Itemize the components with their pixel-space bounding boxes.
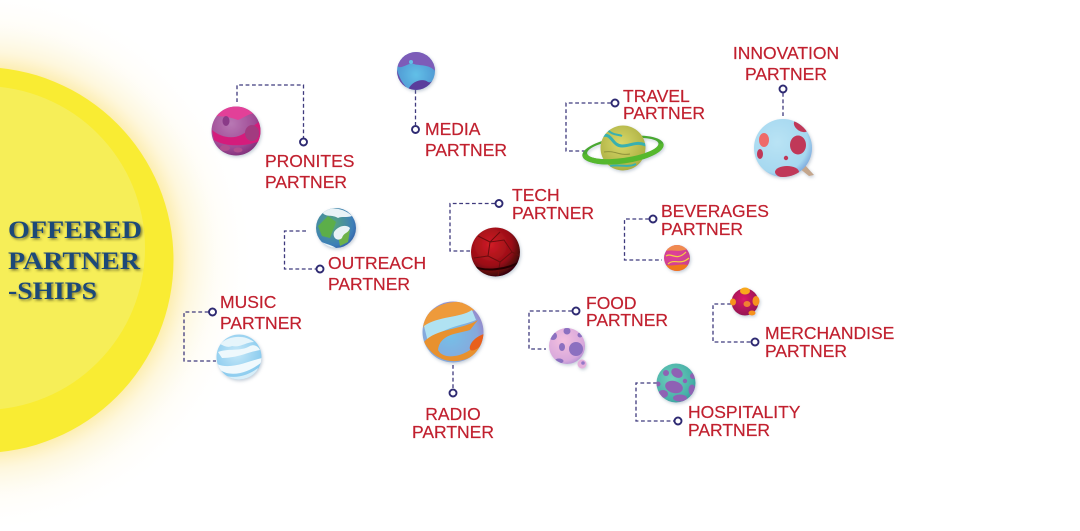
sun outer disc xyxy=(0,67,174,453)
node xyxy=(572,308,580,314)
label: PARTNER xyxy=(512,203,594,223)
connector xyxy=(184,312,216,361)
label: PARTNER xyxy=(661,219,743,239)
title: offered partnerships: PARTNER xyxy=(8,246,141,275)
merchandise partner xyxy=(713,288,894,361)
innovation partner xyxy=(733,43,839,178)
node xyxy=(316,266,324,272)
label: MERCHANDISE xyxy=(765,323,894,343)
media partner xyxy=(396,51,507,160)
title: offered partnerships: -SHIPS xyxy=(8,276,97,305)
node xyxy=(752,338,758,346)
outreach partner xyxy=(284,208,426,294)
node xyxy=(300,138,307,146)
planet: candy xyxy=(664,245,690,272)
label: PARTNER xyxy=(265,172,347,192)
node xyxy=(209,308,216,316)
beverages partner xyxy=(624,201,769,272)
tech partner xyxy=(450,185,594,276)
hospitality partner xyxy=(636,364,801,440)
planet: craters xyxy=(754,117,814,178)
planet: pink moon xyxy=(549,328,586,368)
connector xyxy=(450,204,495,251)
label: HOSPITALITY xyxy=(688,402,801,422)
planet: teal xyxy=(656,364,696,402)
title: offered partnerships xyxy=(8,215,142,305)
node xyxy=(674,418,682,424)
label: FOOD xyxy=(586,293,637,313)
label: TRAVEL xyxy=(623,86,690,106)
label: BEVERAGES xyxy=(661,201,769,221)
node xyxy=(612,100,618,106)
planet: orange swirl xyxy=(422,302,484,362)
node xyxy=(412,126,419,133)
planet: ice xyxy=(216,334,262,380)
planet: earth xyxy=(316,208,356,250)
label: PARTNER xyxy=(425,140,507,160)
node xyxy=(780,86,786,92)
connector xyxy=(636,383,674,421)
travel partner xyxy=(566,86,705,170)
label: PARTNER xyxy=(765,341,847,361)
planet: red xyxy=(471,228,520,276)
node xyxy=(450,390,456,396)
title: offered partnerships: OFFERED xyxy=(8,215,142,244)
connector xyxy=(284,231,316,269)
label: TECH xyxy=(512,185,560,205)
connector xyxy=(713,304,751,342)
connector xyxy=(782,93,784,118)
connector xyxy=(566,103,611,151)
label: PARTNER xyxy=(623,103,705,123)
label: PARTNER xyxy=(586,310,668,330)
label: RADIO xyxy=(425,404,481,424)
label: PARTNER xyxy=(688,420,770,440)
sun glow xyxy=(0,0,256,531)
connector xyxy=(529,311,572,349)
radio partner xyxy=(412,302,494,442)
label: MEDIA xyxy=(425,119,481,139)
planet: magenta xyxy=(730,288,760,316)
sun inner disc xyxy=(0,86,145,410)
label: PARTNER xyxy=(328,274,410,294)
music partner xyxy=(184,292,302,380)
node xyxy=(496,200,502,207)
node xyxy=(650,216,656,222)
connector xyxy=(237,85,304,138)
label: PARTNER xyxy=(220,313,302,333)
pronites partner xyxy=(212,85,354,192)
connector xyxy=(414,90,416,125)
connector xyxy=(452,365,454,389)
label: OUTREACH xyxy=(328,253,426,273)
planet: purple and blue xyxy=(396,51,436,92)
food partner xyxy=(529,293,668,368)
label: MUSIC xyxy=(220,292,276,312)
label: PARTNER xyxy=(412,422,494,442)
sun xyxy=(0,0,256,531)
label: PARTNER xyxy=(745,64,827,84)
planet: ringed xyxy=(581,126,665,170)
label: PRONITES xyxy=(265,151,354,171)
planet: pink xyxy=(212,106,262,156)
connector xyxy=(624,219,662,260)
label: INNOVATION xyxy=(733,43,839,63)
